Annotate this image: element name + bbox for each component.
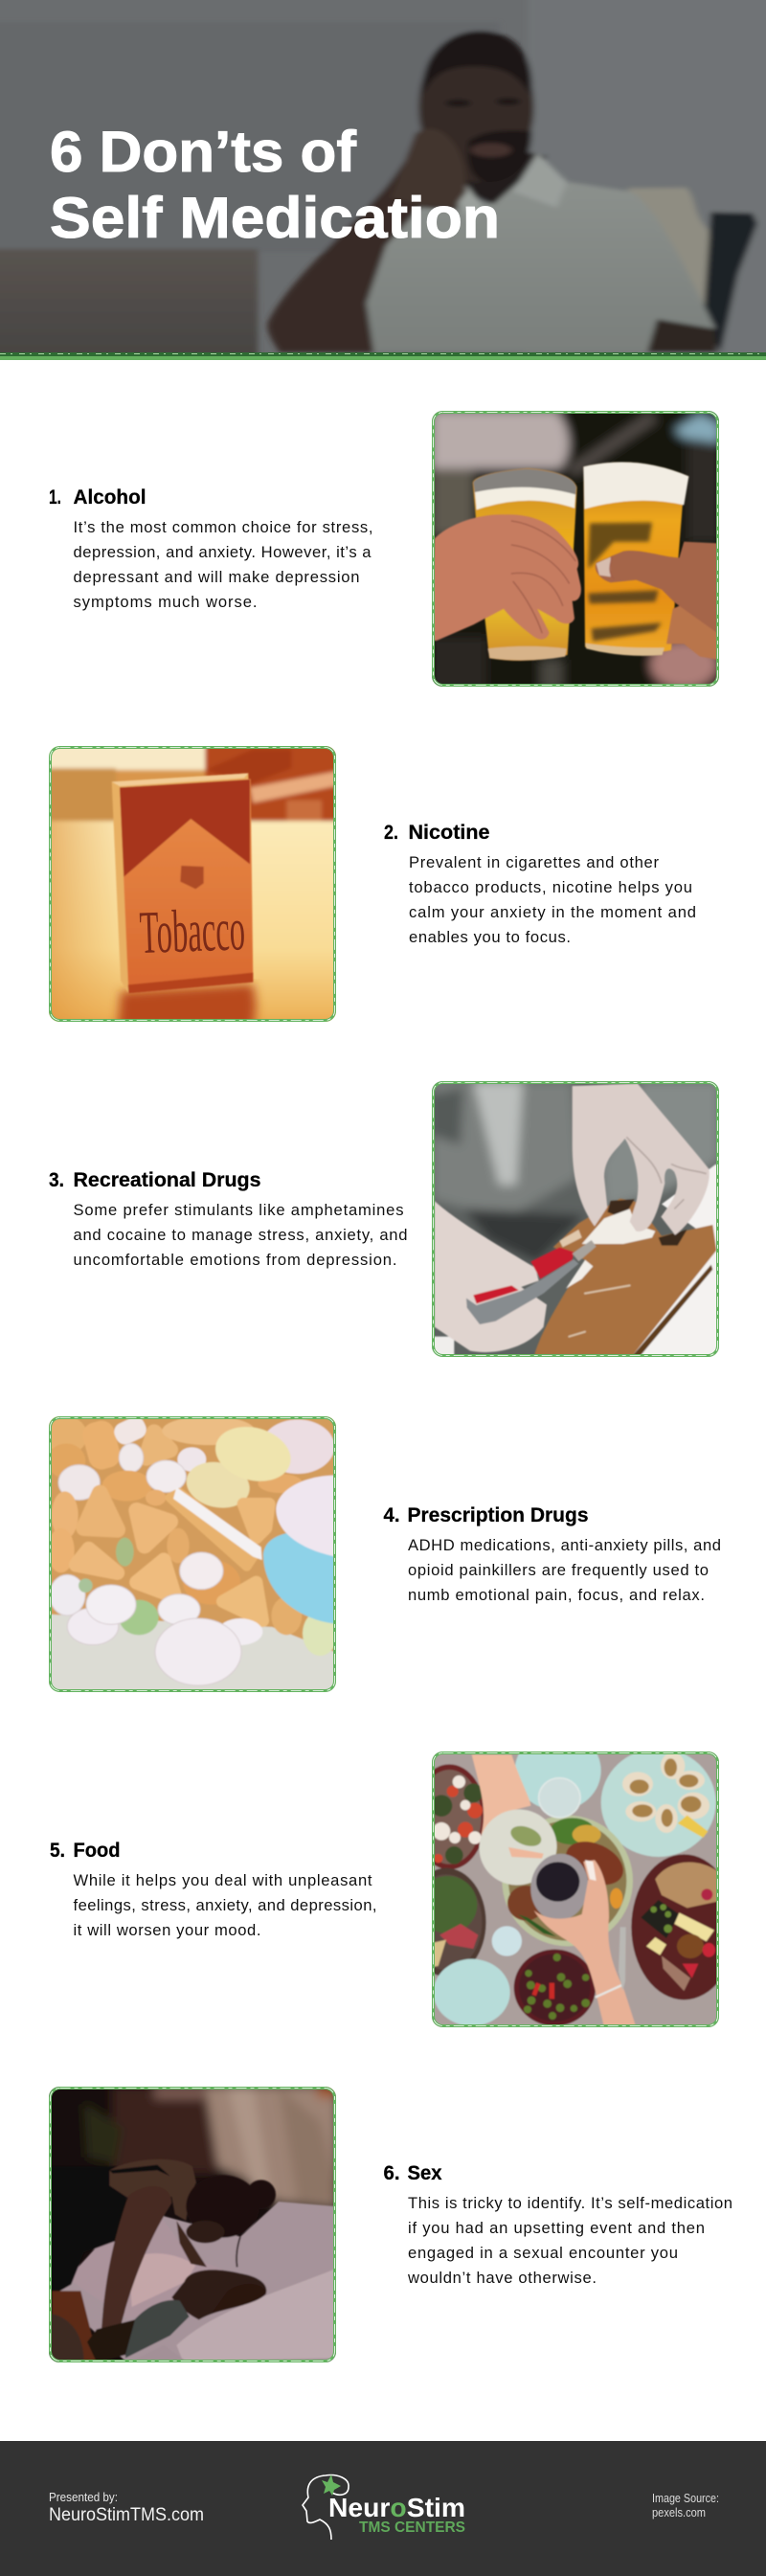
panel: 1 alcohol xyxy=(50,411,719,687)
photo frame xyxy=(50,747,335,1021)
photo frame xyxy=(433,412,718,686)
title: Self Medication xyxy=(50,186,500,250)
text: alcohol body: It’s the most common choice for stress, xyxy=(73,518,373,536)
presented by: NeuroStimTMS.com xyxy=(49,2505,204,2525)
photo: cigarette pack on table xyxy=(49,746,336,1022)
text: alcohol body: symptoms much worse. xyxy=(73,593,257,611)
presented by xyxy=(49,2490,204,2525)
panel: 3 recreational drugs xyxy=(49,1081,719,1357)
panel: 5 food xyxy=(50,1751,719,2027)
text: sex body: wouldn’t have otherwise. xyxy=(407,2269,597,2287)
text: recreational drugs body: uncomfortable emotions from depression. xyxy=(73,1251,396,1269)
text: food body: it will worsen your mood. xyxy=(73,1921,260,1939)
heading: sex xyxy=(383,2162,442,2184)
photo: gloved hands cutting a package xyxy=(432,1081,719,1357)
panel: 6 sex xyxy=(49,2087,732,2362)
hero photo: man thinking with hand on cheek xyxy=(0,0,766,352)
text: recreational drugs body xyxy=(73,1201,408,1269)
photo frame xyxy=(433,1082,718,1356)
text: alcohol body: depression, and anxiety. However, it’s a xyxy=(73,543,372,561)
photo: table of food from above xyxy=(432,1751,719,2027)
text: alcohol body xyxy=(73,518,373,611)
logo: NeuroStim TMS Centers xyxy=(303,2474,465,2540)
text: sex body: engaged in a sexual encounter you xyxy=(408,2244,678,2262)
image source: pexels.com xyxy=(652,2506,706,2520)
text: sex body: if you had an upsetting event and then xyxy=(408,2219,705,2237)
panel: 2 nicotine xyxy=(49,746,695,1022)
text: nicotine body xyxy=(409,853,696,946)
panel: 4 prescription drugs xyxy=(49,1416,720,1692)
photo frame xyxy=(50,1417,335,1691)
heading: nicotine: Nicotine xyxy=(408,822,490,844)
presented by: Presented by: xyxy=(49,2490,118,2504)
footer xyxy=(0,2441,766,2576)
text: recreational drugs body: Some prefer stimulants like amphetamines xyxy=(73,1201,404,1219)
hero banner xyxy=(0,0,766,361)
heading: nicotine: 2. xyxy=(384,822,398,844)
text: nicotine body: tobacco products, nicotine helps you xyxy=(409,878,692,896)
heading: food: Food xyxy=(73,1840,121,1862)
photo: two beers clinking xyxy=(432,411,719,687)
text: food body xyxy=(73,1871,377,1939)
text: nicotine body: calm your anxiety in the moment and xyxy=(409,903,696,921)
icon: head outline with green neuron xyxy=(303,2474,349,2540)
text: food body: While it helps you deal with unpleasant xyxy=(73,1871,372,1889)
heading: recreational drugs: Recreational Drugs xyxy=(73,1169,260,1191)
heading: sex: Sex xyxy=(408,2162,442,2184)
heading: alcohol: 1. xyxy=(49,486,61,508)
photo frame xyxy=(433,1752,718,2026)
image source: Image Source: xyxy=(652,2492,719,2505)
heading: sex: 6. xyxy=(383,2162,400,2184)
heading: alcohol: Alcohol xyxy=(73,486,146,508)
logo: NeuroStim TMS Centers: TMS CENTERS xyxy=(359,2520,465,2536)
text: food body: feelings, stress, anxiety, and depression, xyxy=(73,1896,377,1914)
text: prescription drugs body: numb emotional pain, focus, and relax. xyxy=(408,1586,705,1604)
heading: prescription drugs: 4. xyxy=(383,1504,400,1526)
title xyxy=(50,120,500,250)
text: sex body: This is tricky to identify. It’s self-medication xyxy=(408,2194,732,2212)
text: sex body xyxy=(407,2194,732,2287)
heading: recreational drugs: 3. xyxy=(49,1169,64,1191)
logo: NeuroStim TMS Centers: NeuroStim xyxy=(328,2493,465,2522)
heading: prescription drugs: Prescription Drugs xyxy=(408,1504,588,1526)
text: nicotine body: enables you to focus. xyxy=(409,928,571,946)
text: prescription drugs body: ADHD medications, anti-anxiety pills, and xyxy=(408,1536,721,1554)
photo: pile of pills xyxy=(49,1416,336,1692)
heading: food: 5. xyxy=(50,1840,65,1862)
photo: couple in dim bedroom xyxy=(49,2087,336,2362)
text: prescription drugs body xyxy=(408,1536,721,1604)
text: recreational drugs body: and cocaine to manage stress, anxiety, and xyxy=(73,1226,408,1244)
text: alcohol body: depressant and will make depression xyxy=(73,568,360,586)
text: prescription drugs body: opioid painkillers are frequently used to xyxy=(408,1561,709,1579)
photo: cigarette pack on table: Tobacco xyxy=(139,895,246,966)
text: nicotine body: Prevalent in cigarettes and other xyxy=(409,853,659,871)
photo frame xyxy=(50,2088,335,2361)
heading: food xyxy=(50,1840,121,1862)
title: 6 Don’ts of xyxy=(50,120,357,184)
image source xyxy=(652,2492,719,2520)
